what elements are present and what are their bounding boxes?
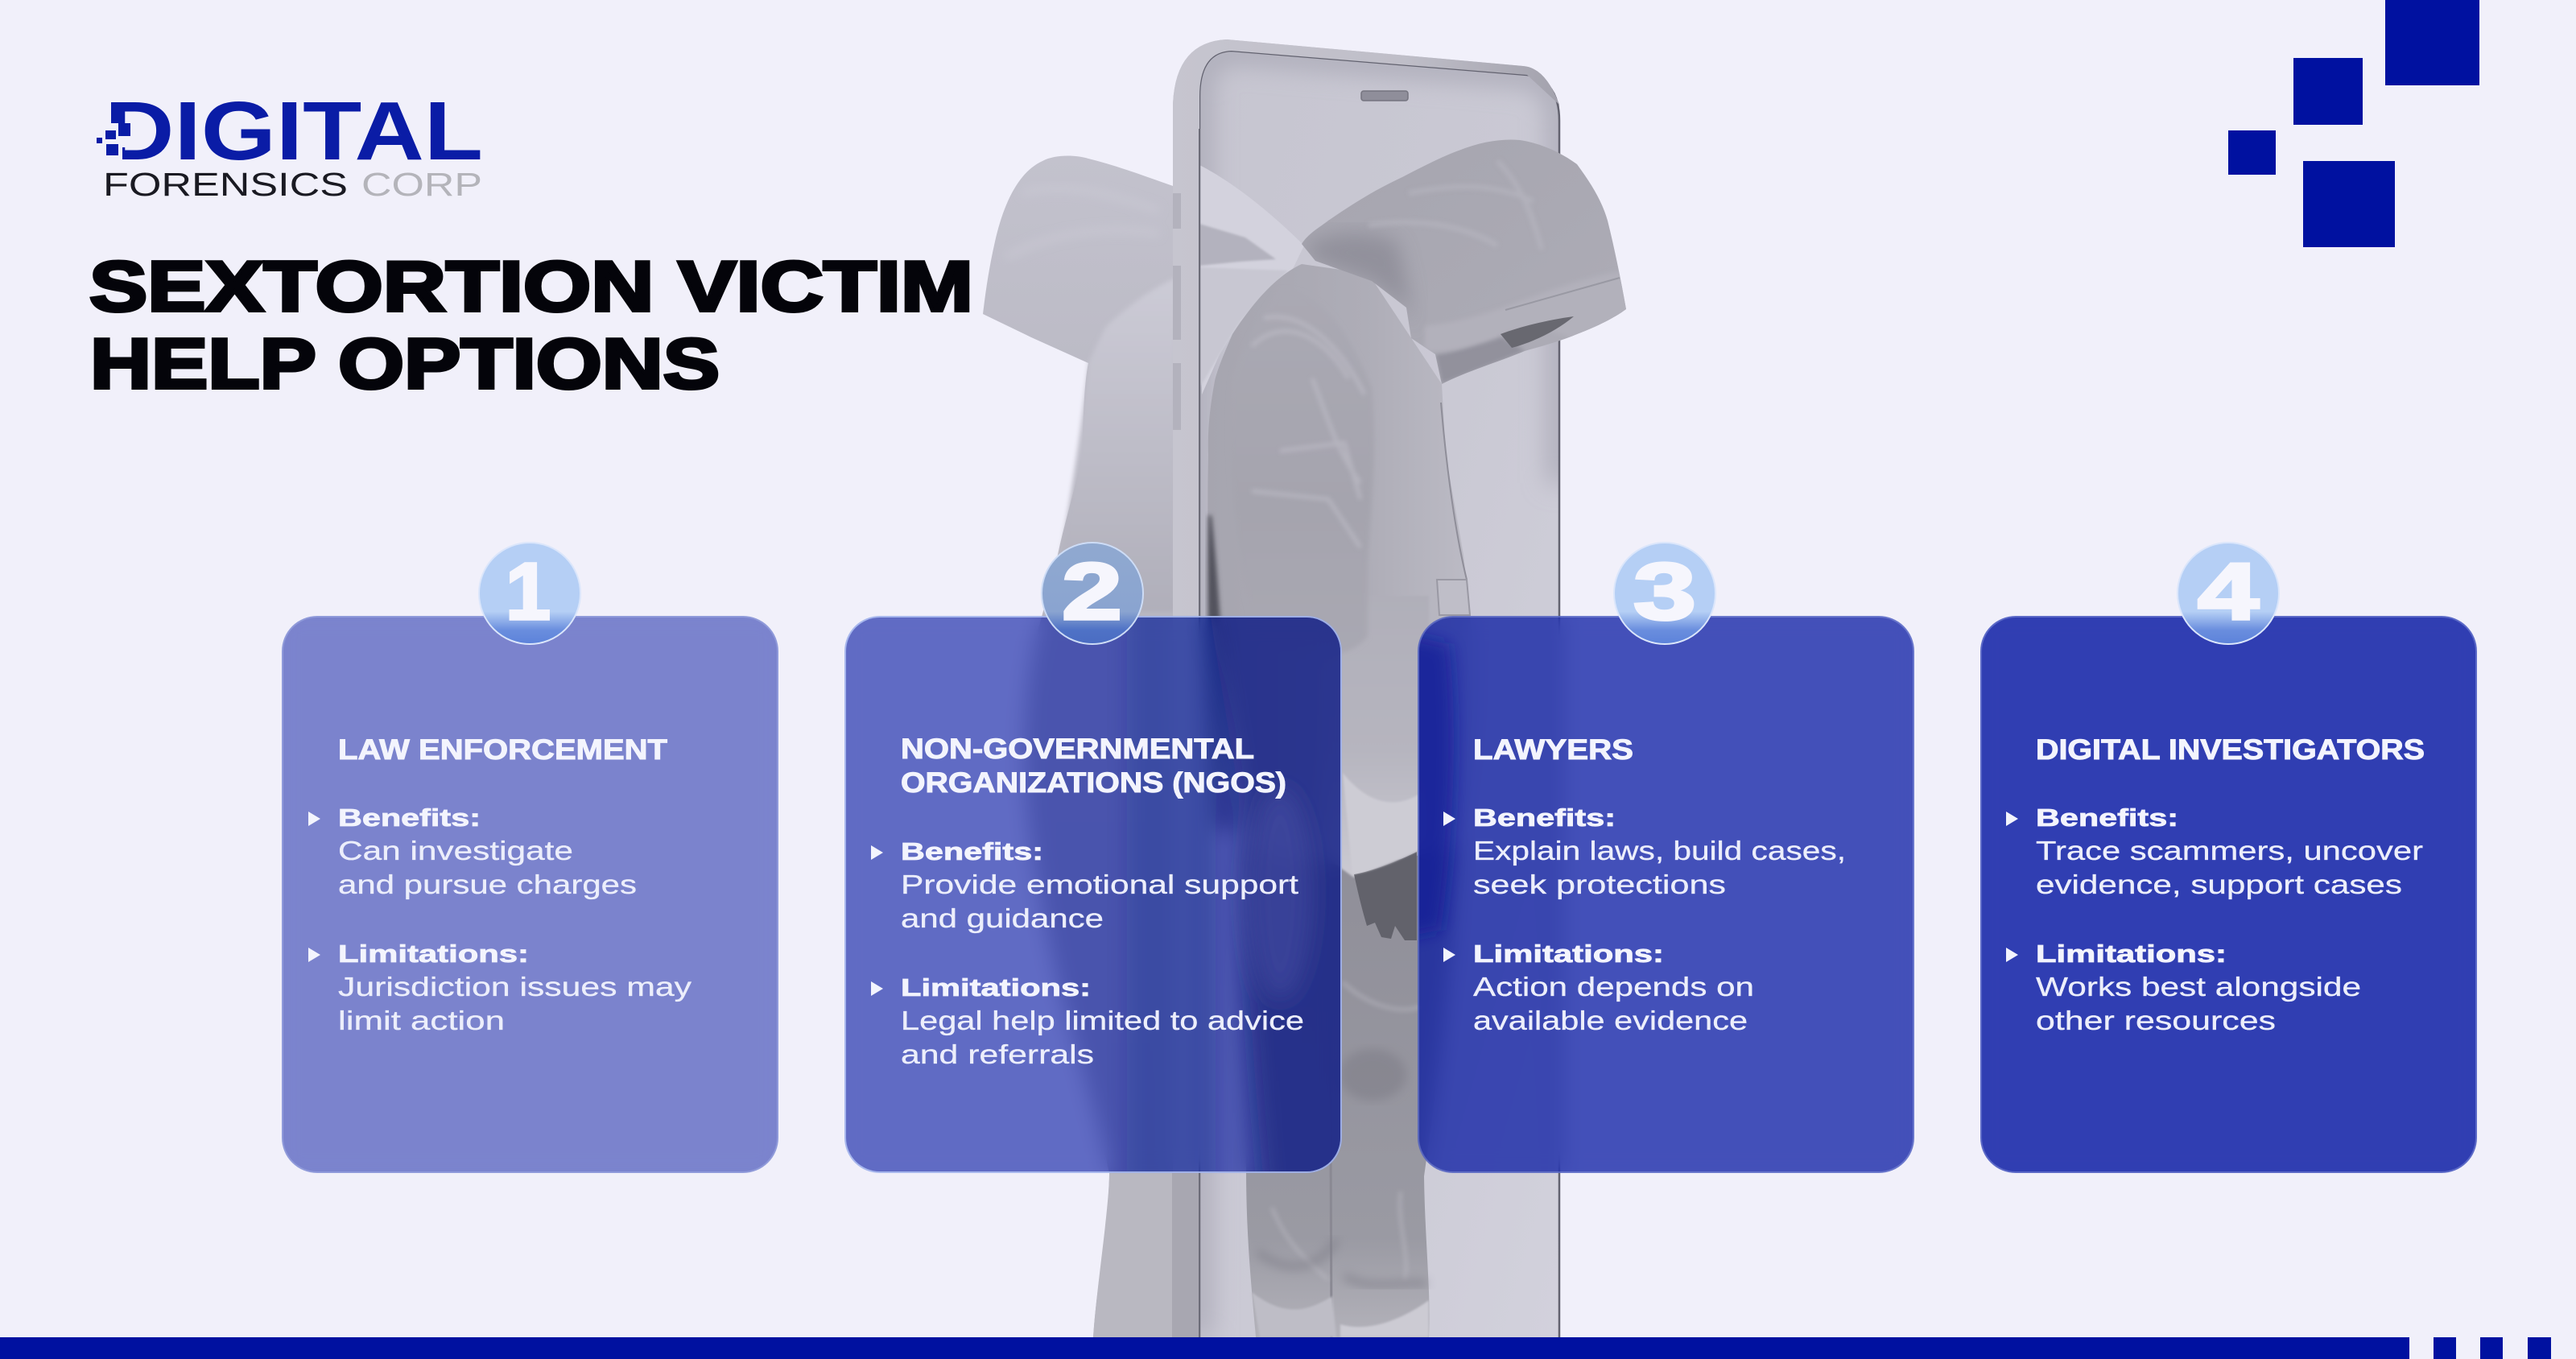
phone speaker [1361,91,1408,101]
limitations: Jurisdiction issues may [338,972,692,1002]
benefits [308,803,637,899]
limitations: limit action [338,1006,505,1035]
heading: DIGITAL INVESTIGATORS [2036,734,2425,766]
logo: Digital Forensics Corp [97,85,483,203]
logo: Digital Forensics Corp: CORP [361,166,482,203]
limitations [1443,940,1754,1035]
panel 4: digital investigators [1980,542,2477,1173]
title: SEXTORTION VICTIM [89,246,973,326]
heading: LAWYERS [1473,734,1633,766]
limitations: available evidence [1473,1006,1748,1035]
phone frame and side buttons [1172,39,1559,1337]
number badge 1: 1 [506,547,551,637]
hem and lower jacket [1320,596,1429,878]
benefits [1443,803,1846,899]
heading: LAW ENFORCEMENT [338,734,667,766]
limitations: Limitations: [1473,940,1664,968]
panel 2: non-governmental organizations [844,542,1342,1173]
panel 1: law enforcement [282,542,778,1173]
jacket pocket [1437,580,1470,615]
limitations [871,973,1304,1069]
torso and jacket [1208,264,1472,864]
benefits: Explain laws, build cases, [1473,836,1846,865]
limitations: Works best alongside [2036,972,2361,1002]
number badge 2: 2 [1062,547,1122,637]
limitations: Limitations: [901,973,1091,1002]
benefits [871,837,1298,933]
decorative squares top right [2228,0,2479,247]
benefits: Benefits: [901,837,1043,865]
limitations: and referrals [901,1039,1094,1069]
ghost figure behind phone [983,156,1175,1337]
ghost seen through the glass [1199,165,1304,394]
benefits: Benefits: [338,803,481,832]
logo: Digital Forensics Corp: DIGITAL [105,85,483,177]
limitations [308,940,692,1035]
benefits: and guidance [901,903,1104,933]
jacket zip line [1441,403,1467,580]
back shadow [1208,515,1232,829]
number badge 2 [1042,543,1143,644]
benefits: and pursue charges [338,870,637,899]
sleeve cuff [1343,773,1421,874]
limitations: other resources [2036,1006,2276,1035]
number badge 3 [1614,543,1715,644]
limitations: Limitations: [338,940,529,968]
heading [901,733,1286,799]
hand [1354,852,1417,940]
limitations [2006,940,2361,1035]
panel 3: lawyers [1418,542,1914,1173]
hooded figure [1208,140,1634,1337]
number badge 4 [2178,543,2279,644]
logo: Digital Forensics Corp: FORENSICS [103,166,348,203]
benefits: Provide emotional support [901,870,1298,899]
benefits [2006,803,2423,899]
heading: NON-GOVERNMENTAL [901,733,1254,765]
title: HELP OPTIONS [90,324,720,403]
number badge 4: 4 [2198,547,2260,637]
benefits: Benefits: [1473,803,1616,832]
number badge 3: 3 [1633,547,1696,637]
hood opening [1501,316,1574,348]
illustration: hooded figure stepping out of smartphone [983,39,1626,1337]
sleeve folds [1252,317,1364,547]
hood [1302,140,1634,384]
limitations: Legal help limited to advice [901,1006,1304,1035]
heading: ORGANIZATIONS (NGOS) [901,767,1286,799]
number badge 1 [479,543,580,644]
title [89,246,973,403]
bottom bar with blocks [0,1337,2551,1359]
benefits: Can investigate [338,836,573,865]
phone screen [1173,39,1559,1337]
benefits: Trace scammers, uncover [2036,836,2423,865]
sleeve [1230,290,1374,655]
limitations: Limitations: [2036,940,2227,968]
benefits: Benefits: [2036,803,2178,832]
pants [1236,837,1459,1337]
benefits: seek protections [1473,870,1726,899]
limitations: Action depends on [1473,972,1754,1002]
benefits: evidence, support cases [2036,870,2402,899]
